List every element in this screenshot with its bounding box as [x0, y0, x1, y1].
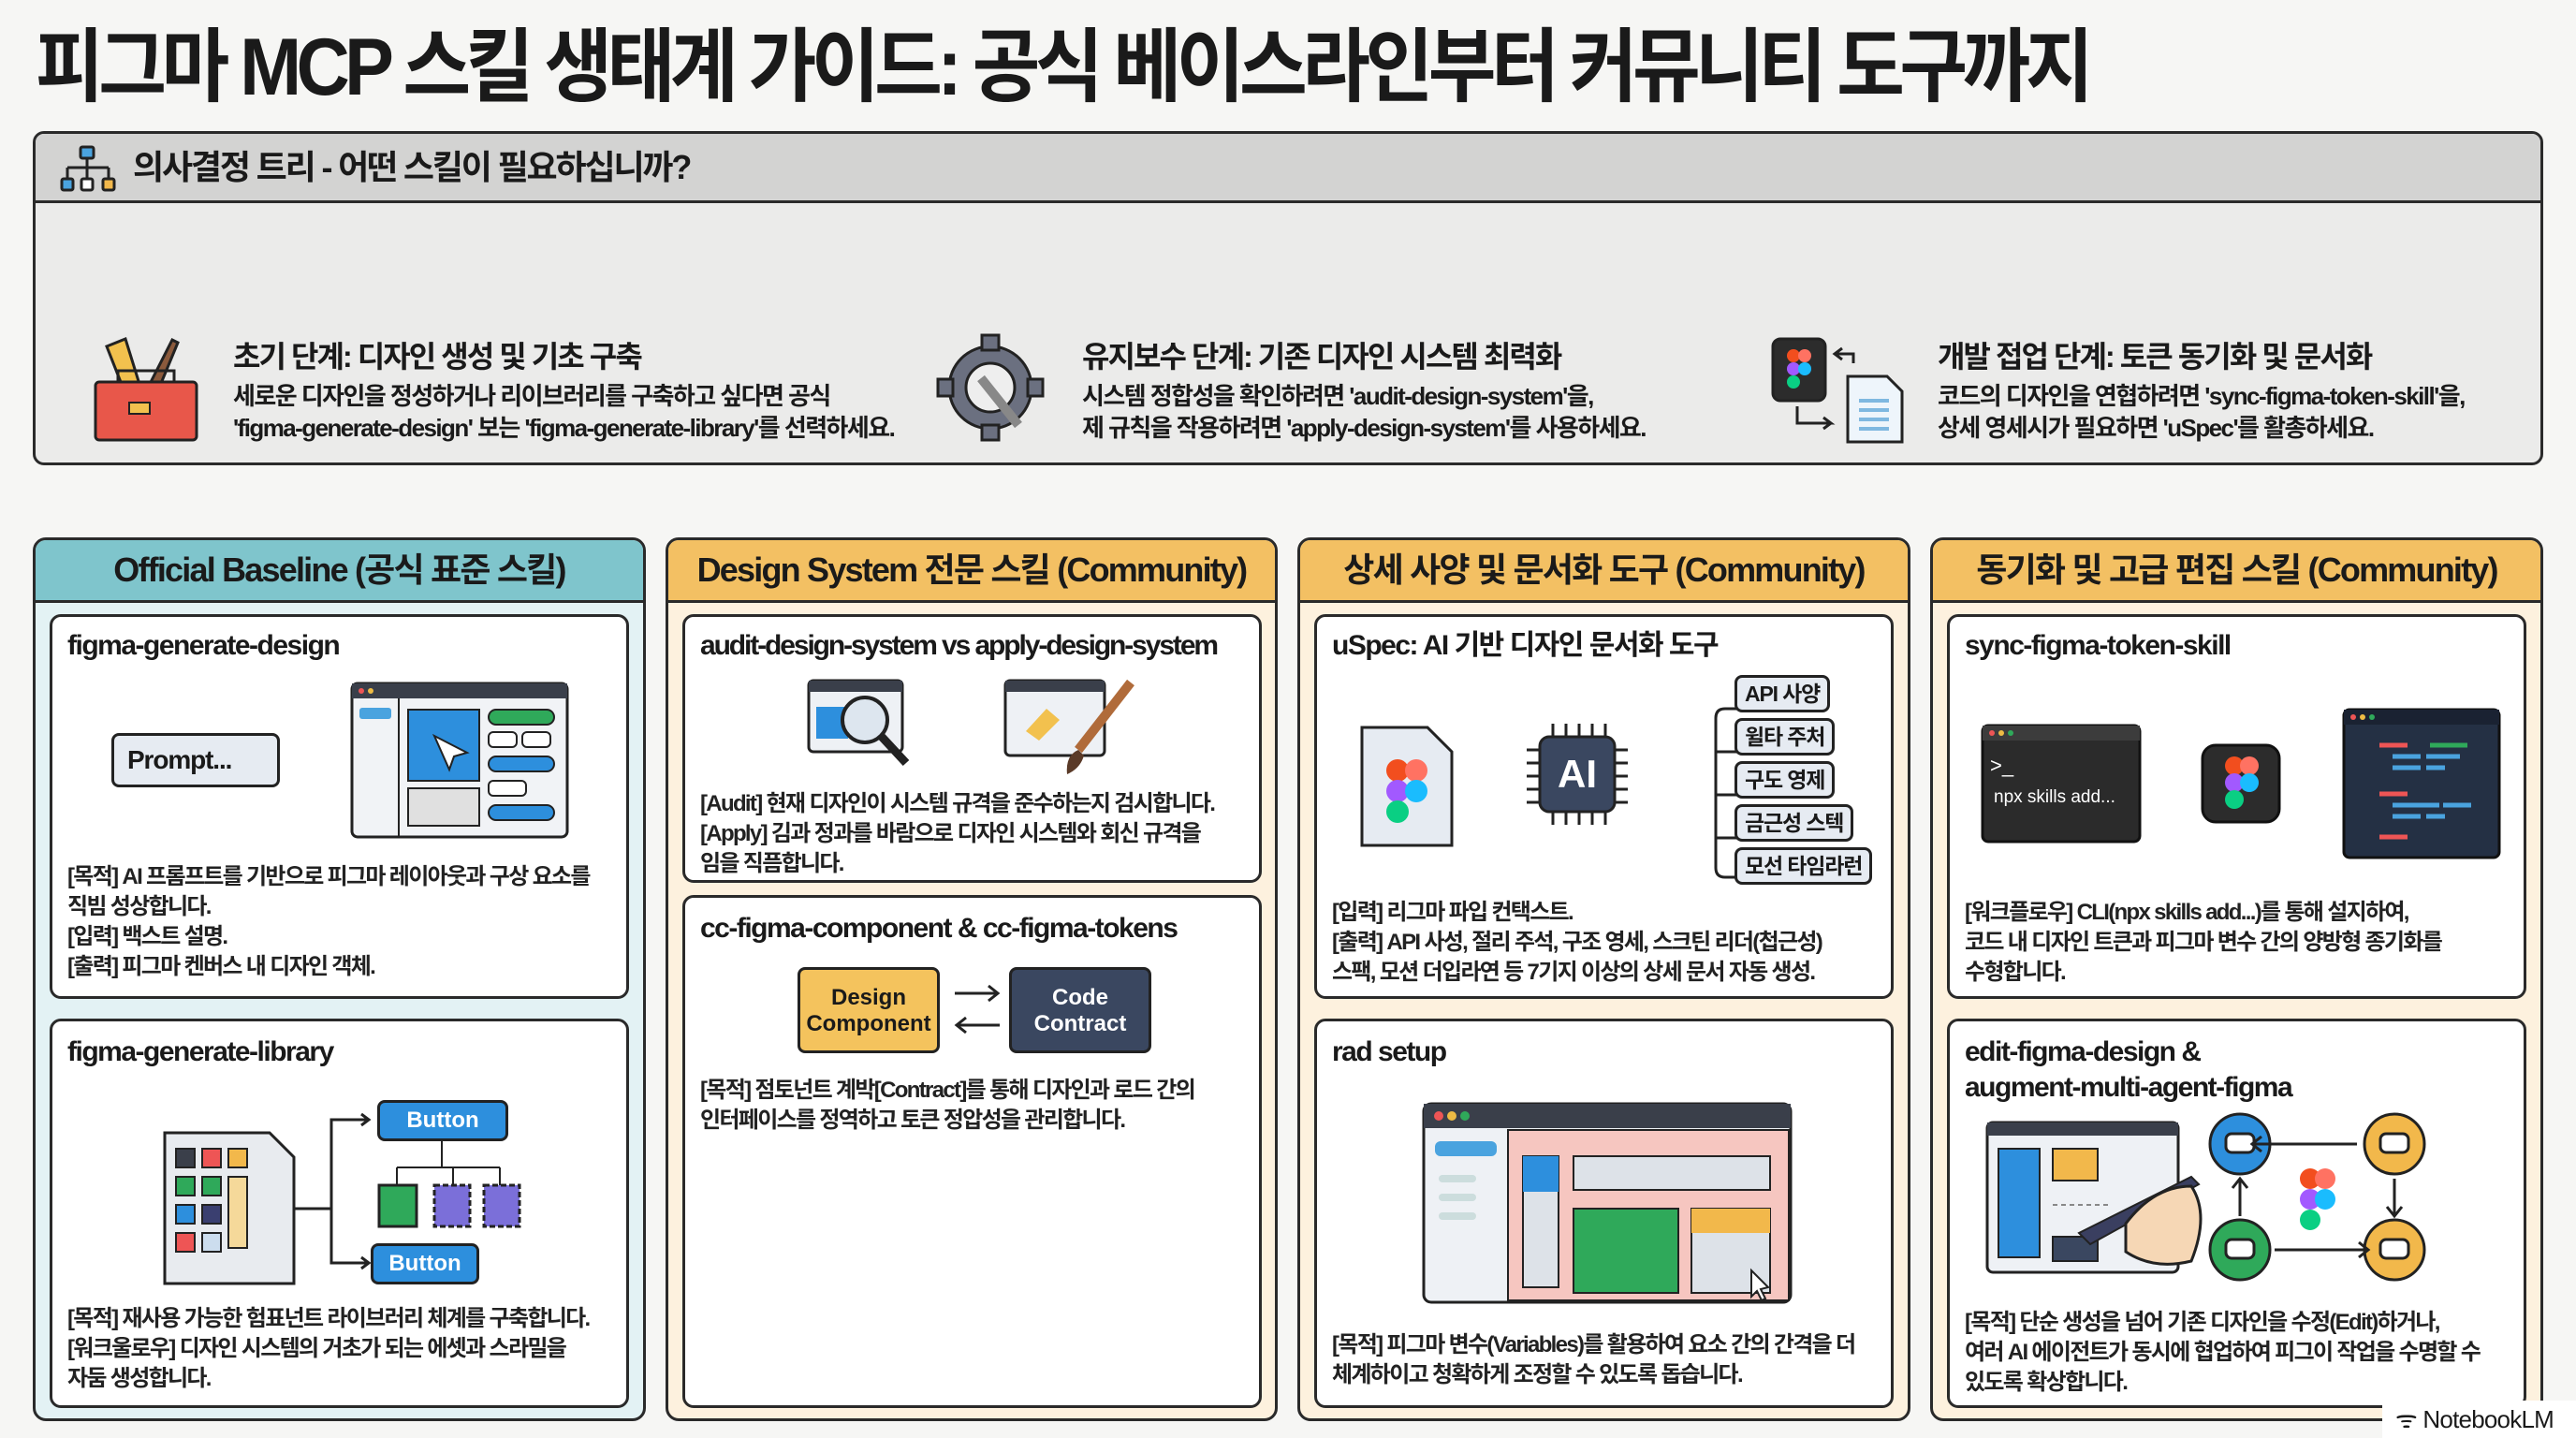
decision item 1: 'figma-generate-design' 보는 'figma-generate-library'를 선력하세요.: [233, 414, 894, 442]
text: [Apply] 김과 정과를 바람으로 디자인 시스템와 회신 규격을: [700, 821, 1200, 846]
column header: [1300, 540, 1908, 603]
text: [워크플로우] CLI(npx skills add...)를 통해 설지하여,: [1965, 900, 2408, 925]
icon: figma sync doc: [1771, 337, 1904, 444]
text: 수형합니다.: [1965, 960, 2065, 985]
badge: NotebookLM: [2382, 1401, 2576, 1438]
button 2: Button: [388, 1251, 461, 1276]
design component box: [798, 967, 940, 1053]
icon: terminal: >_: [1990, 754, 2014, 777]
panel: sync and advanced editing: [1930, 537, 2543, 1421]
icon: AI chip: AI: [1558, 752, 1597, 796]
design component box: Design: [831, 985, 906, 1010]
text: [1965, 1310, 2481, 1395]
icon: audit magnifier: [807, 680, 910, 766]
card: figma-generate-library: figma-generate-library: [67, 1036, 333, 1067]
icon: code window: [2342, 708, 2501, 859]
text: [1332, 1332, 1854, 1387]
icon: spacing window: [1423, 1103, 1792, 1303]
code contract box: [1009, 967, 1151, 1053]
text: [출력] API 사성, 절리 주석, 구조 영세, 스크틴 리더(첩근성): [1332, 930, 1822, 955]
card: sync-figma-token-skill: [1947, 614, 2526, 999]
tags: 구도 영제: [1745, 768, 1824, 792]
icon: figma logo: [2202, 743, 2280, 824]
text: 있도록 확상합니다.: [1965, 1370, 2127, 1395]
decision item 1: 세로운 디자인을 정성하거나 리이브러리를 구축하고 싶다면 공식: [233, 382, 830, 410]
decision item 2: [936, 333, 1646, 442]
decision tree header: [36, 134, 2540, 203]
text: [목적] 재사용 가능한 험표넌트 라이브러리 체계를 구축합니다.: [67, 1306, 590, 1331]
decision item 3: 상세 영세시가 필요하면 'uSpec'를 활총하세요.: [1938, 414, 2374, 442]
decision item 3: 코드의 디자인을 연협하려면 'sync-figma-token-skill'을,: [1938, 382, 2465, 410]
text: 자둠 생성합니다.: [67, 1366, 211, 1391]
button 1: Button: [406, 1108, 479, 1133]
icon: hierarchy: [60, 146, 116, 191]
card: edit-figma-design: augment-multi-agent-figma: [1965, 1072, 2291, 1103]
tags: 윌타 주처: [1745, 725, 1824, 749]
text: [입력] 백스트 설명.: [67, 924, 227, 949]
icon: terminal: [1981, 725, 2142, 843]
decision item 3: [1771, 337, 2465, 444]
text: 임을 직픔합니다.: [700, 851, 843, 876]
text: [목적] AI 프롬프트를 기반으로 피그마 레이아웃과 구상 요소를: [67, 864, 590, 889]
design component box: Component: [806, 1011, 931, 1036]
column header: Official Baseline (공식 표준 스킬): [113, 550, 565, 589]
card: uSpec: uSpec: AI 기반 디자인 문서화 도구: [1332, 630, 1718, 661]
tags: 모선 타임라런: [1745, 854, 1862, 878]
text: [목적] 단순 생성을 넘어 기존 디자인을 수정(Edit)하거나,: [1965, 1310, 2439, 1335]
tags: 금근성 스텍: [1745, 811, 1843, 835]
text: [67, 1306, 590, 1391]
icon: design window: [350, 682, 569, 839]
column header: Design System 전문 스킬 (Community): [697, 550, 1246, 589]
text: 직빔 성상합니다.: [67, 894, 211, 919]
item 3 text: 개발 접업 단계: 토큰 동기화 및 문서화: [1938, 340, 2371, 374]
text: [워크울로우] 디자인 시스템의 거초가 되는 에셋과 스라밀을: [67, 1336, 565, 1361]
card: sync-figma-token-skill: sync-figma-token-skill: [1965, 630, 2231, 661]
code contract box: Code: [1052, 985, 1108, 1010]
text: [목적] 피그마 변수(Variables)를 활용하여 요소 간의 간격을 더: [1332, 1332, 1854, 1357]
text: [1332, 900, 1822, 985]
title: 피그마 MCP 스킬 생태계 가이드: 공식 베이스라인부터 커뮤니티 도구까지: [36, 22, 2088, 112]
card: cc-figma-component: cc-figma-component & cc-figma-tokens: [700, 913, 1177, 944]
text: [67, 864, 590, 979]
prompt box: Prompt...: [127, 745, 231, 774]
card: figma-generate-design: [50, 614, 629, 999]
text: 인터페이스를 정역하고 토큰 정압성을 관리합니다.: [700, 1108, 1124, 1133]
icon: AI chip: [1527, 724, 1628, 825]
text: [Audit] 현재 디자인이 시스템 규격을 준수하는지 검시합니다.: [700, 791, 1214, 816]
column header: 동기화 및 고급 편집 스킬 (Community): [1976, 550, 2497, 589]
button 1: [377, 1100, 508, 1141]
icon: figma file: [1361, 726, 1453, 846]
item 2 text: 유지보수 단계: 기존 디자인 시스템 최력화: [1082, 340, 1560, 374]
text: [목적] 점토넌트 계박[Contract]를 통해 디자인과 로드 간의: [700, 1078, 1194, 1103]
tags: [1734, 675, 1872, 885]
card: rad setup: [1314, 1019, 1894, 1408]
card: edit-figma-design: [1947, 1019, 2526, 1408]
item 1 text: 초기 단계: 디자인 생성 및 기초 구축: [233, 340, 641, 374]
decision item 2: 시스템 정합성을 확인하려면 'audit-design-system'을,: [1082, 382, 1593, 410]
column header: 상세 사양 및 문서화 도구 (Community): [1343, 550, 1865, 589]
decision item 2: 제 규칙을 작용하려면 'apply-design-system'를 사용하세요.: [1082, 414, 1646, 442]
icon: edit window with hand: [1986, 1122, 2202, 1273]
icon: apply brush: [1003, 680, 1134, 774]
card: figma-generate-design: figma-generate-design: [67, 630, 339, 661]
agents diagram: [2209, 1112, 2426, 1281]
tag tree: [1715, 708, 1737, 878]
diagram: library: [163, 1112, 520, 1284]
tags: API 사양: [1745, 682, 1820, 706]
text: 스팩, 모션 더입라연 등 7기지 이상의 상세 문서 자동 생성.: [1332, 960, 1814, 985]
text: [1965, 900, 2442, 985]
column header: [36, 540, 643, 603]
panel: decision tree: [33, 131, 2543, 465]
prompt box: [111, 733, 280, 787]
card: edit-figma-design: edit-figma-design &: [1965, 1036, 2201, 1067]
column header: [1933, 540, 2540, 603]
panel: design system community: [666, 537, 1278, 1421]
card: audit vs apply: audit-design-system vs apply-design-system: [700, 630, 1217, 661]
card: figma-generate-library: [50, 1019, 629, 1408]
card: uSpec: [1314, 614, 1894, 999]
button 2: [371, 1243, 479, 1284]
icon: gear wrench: [936, 333, 1045, 442]
text: [출력] 피그마 켄버스 내 디자인 객체.: [67, 954, 374, 979]
arrows: [955, 985, 1000, 1034]
text: 체계하이고 청확하게 조정할 수 있도록 돕습니다.: [1332, 1362, 1742, 1387]
panel: spec and docs community: [1297, 537, 1910, 1421]
text: 여러 AI 에이전트가 동시에 협업하여 피그이 작업을 수명할 수: [1965, 1340, 2480, 1365]
header text: 의사결정 트리 - 어떤 스킬이 필요하십니까?: [133, 148, 690, 186]
icon: toolbox: [94, 337, 198, 442]
text: [700, 791, 1215, 876]
icon: terminal: npx skills add...: [1994, 787, 2115, 807]
column header: [668, 540, 1275, 603]
card: cc-figma-component: [682, 895, 1262, 1408]
text: [700, 1078, 1194, 1133]
text: 코드 내 디자인 트큰과 피그마 변수 간의 양방형 종기화를: [1965, 930, 2441, 955]
badge: NotebookLM: ᯤ NotebookLM: [2395, 1405, 2554, 1433]
code contract box: Contract: [1034, 1011, 1126, 1036]
decision item 1: [94, 337, 895, 442]
panel: official baseline: [33, 537, 646, 1421]
card: rad setup: rad setup: [1332, 1036, 1446, 1067]
text: [입력] 리그마 파입 컨택스트.: [1332, 900, 1573, 925]
card: audit vs apply: [682, 614, 1262, 883]
